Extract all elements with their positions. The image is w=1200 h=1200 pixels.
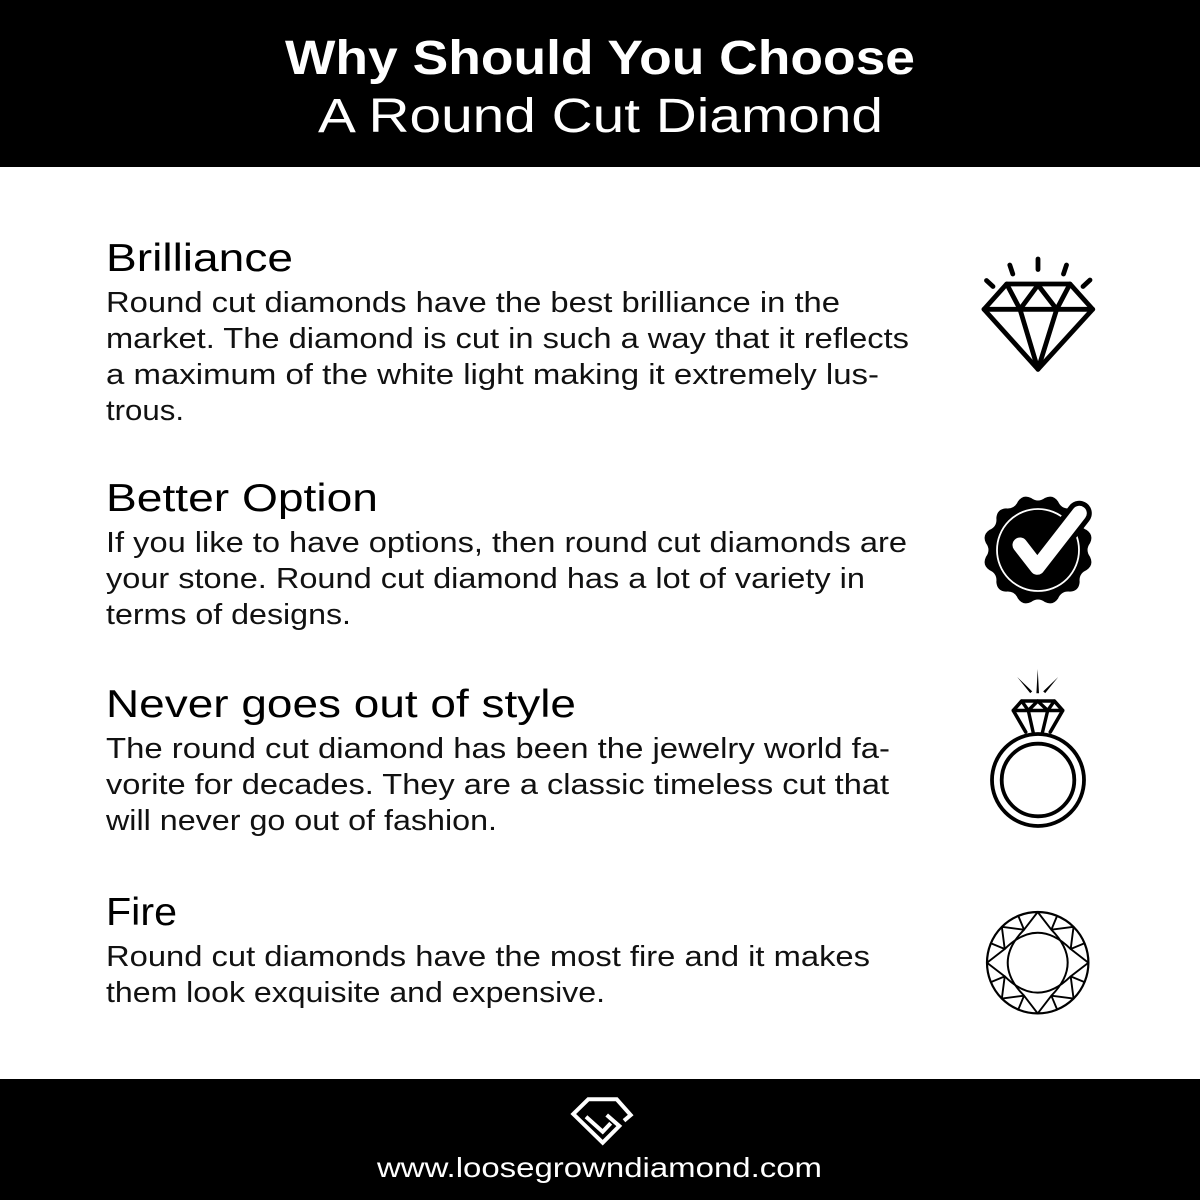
text block: better option: If you like to have options, then round cut diamonds are [106,527,907,559]
heading: better option: Better Option [106,477,378,520]
text block: brilliance [106,287,909,427]
title [285,32,915,143]
text block: brilliance: Round cut diamonds have the best brilliance in the [106,287,840,319]
icon: diamond ring [992,669,1084,826]
panel: brilliance text [106,237,909,427]
text block: brilliance: market. The diamond is cut in such a way that it reflects [106,323,909,355]
website url: www.loosegrowndiamond.com [376,1152,822,1183]
text block: fire: them look exquisite and expensive. [106,977,605,1009]
text block: better option [106,527,907,631]
text block: never goes out of style: The round cut diamond has been the jewelry world fa- [106,733,890,765]
heading: brilliance: Brilliance [106,237,293,280]
text block: never goes out of style: will never go out of fashion. [105,805,497,837]
icon: check badge [985,497,1091,603]
text block: brilliance: trous. [106,395,184,427]
text block: better option: your stone. Round cut diamond has a lot of variety in [106,563,865,595]
panel: fire text [106,891,870,1009]
text block: never goes out of style: vorite for decades. They are a classic timeless cut that [106,769,889,801]
panel: never goes out of style text [105,683,890,837]
text block: fire [106,941,870,1009]
title: Why Should You Choose [285,32,915,85]
text block: fire: Round cut diamonds have the most fire and it makes [106,941,870,973]
heading: fire: Fire [106,891,177,934]
text block: never goes out of style [105,733,890,837]
icon: brand logo [573,1099,631,1143]
text block: better option: terms of designs. [106,599,351,631]
icon: round cut diamond facets [987,912,1088,1013]
icon: sparkling diamond [984,259,1093,369]
panel: better option text [106,477,907,631]
text block: brilliance: a maximum of the white light making it extremely lus- [106,359,879,391]
heading: never goes out of style: Never goes out of style [106,683,576,726]
header band [0,0,1200,167]
title: A Round Cut Diamond [318,90,883,143]
footer band [0,1079,1200,1200]
